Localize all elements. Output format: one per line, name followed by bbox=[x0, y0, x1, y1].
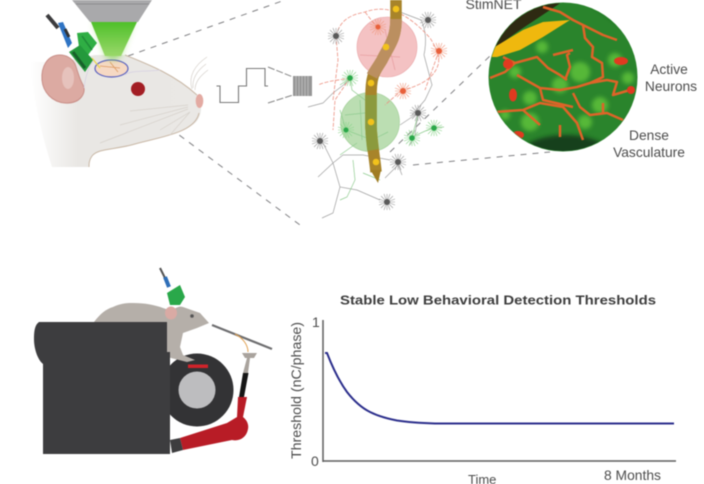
neural network diagram bbox=[308, 0, 447, 218]
head connector bbox=[160, 268, 185, 305]
label: Dense Vasculature: Dense bbox=[629, 128, 669, 143]
head connector bbox=[47, 15, 100, 72]
sensor tip bbox=[242, 353, 257, 373]
cranial window bbox=[95, 60, 128, 77]
nose bbox=[196, 94, 203, 108]
green neurons bbox=[338, 70, 442, 146]
whiskers bbox=[100, 57, 208, 143]
y axis label: Threshold (nC/phase) bbox=[288, 322, 304, 459]
mouse eye bbox=[190, 314, 194, 318]
yellow wedge: stimNET bbox=[491, 20, 570, 57]
x axis bbox=[323, 460, 676, 462]
ear bbox=[42, 55, 84, 103]
threshold curve bbox=[325, 353, 674, 424]
chart title: Stable Low Behavioral Detection Thresholds bbox=[340, 292, 656, 308]
label: Active Neurons: Active bbox=[650, 62, 688, 77]
black sleeve bbox=[239, 373, 248, 397]
two-photon image disc bbox=[488, 2, 638, 152]
bright neurons bbox=[500, 41, 634, 131]
mouse body bbox=[94, 303, 209, 362]
lick rod bbox=[212, 325, 272, 349]
electrode sites bbox=[368, 6, 399, 165]
label: Active Neurons bbox=[645, 62, 697, 94]
grey neurons bbox=[312, 12, 436, 210]
dark edge regions bbox=[496, 2, 560, 47]
dendrites bbox=[308, 12, 432, 218]
red bar bbox=[188, 364, 208, 368]
sensor wire bbox=[235, 334, 248, 352]
mouse ear bbox=[165, 306, 177, 320]
red blobs bbox=[503, 57, 635, 139]
arm base bbox=[170, 438, 183, 453]
chart: thresholds: 8 Months bbox=[604, 468, 661, 483]
running wheel bbox=[160, 354, 234, 426]
label: Dense Vasculature: Vasculature bbox=[613, 145, 685, 160]
shank bbox=[371, 0, 396, 172]
chart: thresholds: 0 bbox=[311, 453, 319, 469]
dashed zoom lines bbox=[112, 0, 550, 225]
mouse head illustration bbox=[30, 55, 208, 167]
y tick labels: 1 bbox=[312, 314, 320, 330]
chart: thresholds bbox=[288, 292, 676, 484]
platform block bbox=[34, 322, 170, 454]
red lever arm bbox=[180, 397, 248, 450]
behaviour rig illustration bbox=[34, 268, 272, 454]
stimulation waveform bbox=[216, 67, 312, 103]
vasculature bbox=[490, 7, 630, 140]
y axis bbox=[322, 320, 324, 462]
eye bbox=[131, 82, 145, 96]
green dendrites bbox=[340, 78, 444, 200]
orange neurons bbox=[370, 19, 447, 99]
red dashed neurons bbox=[318, 9, 439, 130]
label: Active Neurons: Neurons bbox=[645, 79, 697, 94]
microscope objective and green light cone bbox=[72, 0, 152, 58]
label: Dense Vasculature bbox=[613, 128, 685, 160]
green activation zone bbox=[340, 92, 400, 152]
pink activation zone bbox=[357, 17, 417, 77]
head bbox=[30, 55, 201, 167]
